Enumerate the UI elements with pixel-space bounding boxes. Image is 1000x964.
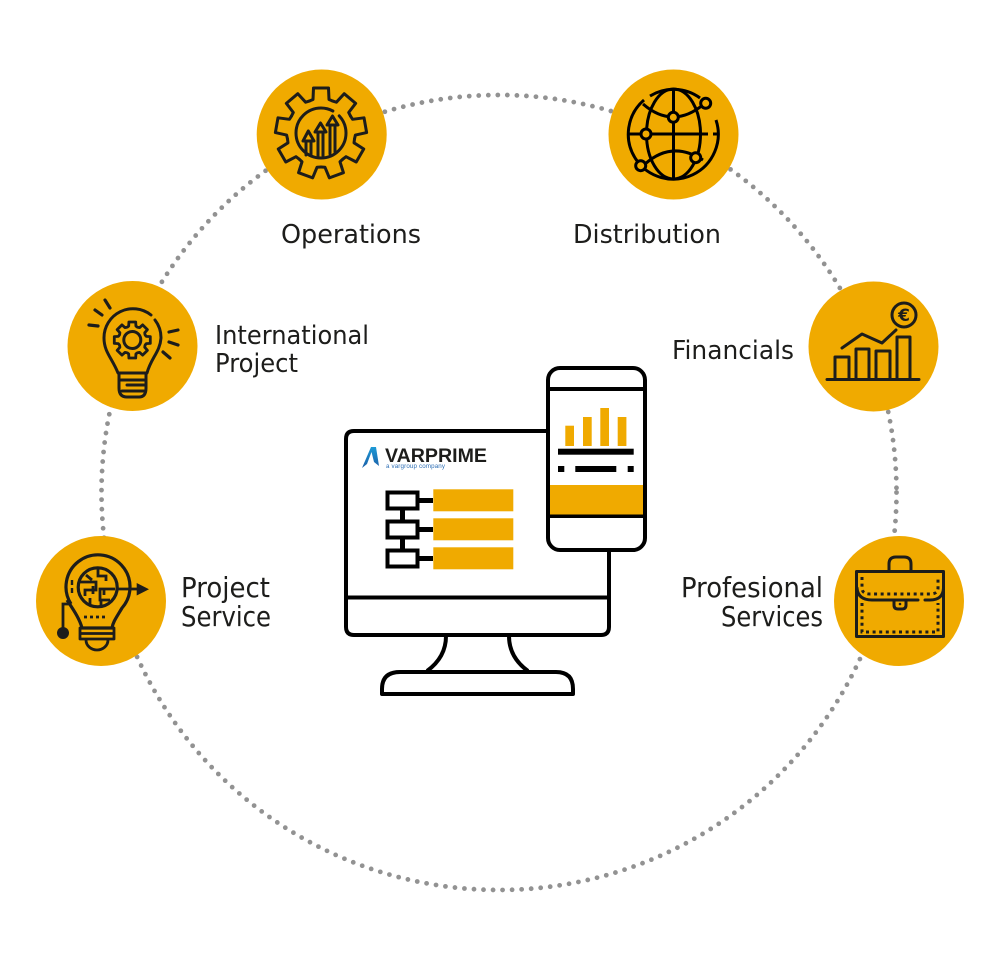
label: Operations: Operations [281,220,421,250]
dotted ring [102,95,896,890]
logo: Varprime: a vargroup company [386,463,446,470]
label: Project Service: Service [181,600,271,633]
label: International Project: International [215,321,369,351]
node: Professional Services [834,536,964,666]
phone [548,368,645,550]
label: International Project: Project [215,349,298,379]
phone bar chart [565,408,626,446]
icon: bar chart with euro coin: € [897,306,910,326]
icon: briefcase [856,557,944,636]
label: Profesional Services: Services [721,600,823,633]
icon: bulb with maze and arrow [57,555,149,650]
node: Project Service [36,536,166,666]
monitor [346,431,609,694]
node: Financials [808,282,938,412]
icon: light bulb with gear [89,300,178,397]
label: Project Service: Project [181,571,270,604]
logo: Varprime: VARPRIME [385,445,487,467]
flow diagram [388,489,513,569]
node: International Project [68,281,198,411]
icon: globe network [628,89,718,179]
node: Operations [257,70,387,200]
illustration: monitor and phone [346,368,645,694]
icon: gear with arrows [275,88,367,179]
label: Distribution: Distribution [573,220,721,250]
label: Profesional Services: Profesional [681,571,823,604]
node: Distribution [608,70,738,200]
label: Financials: Financials [672,336,794,366]
